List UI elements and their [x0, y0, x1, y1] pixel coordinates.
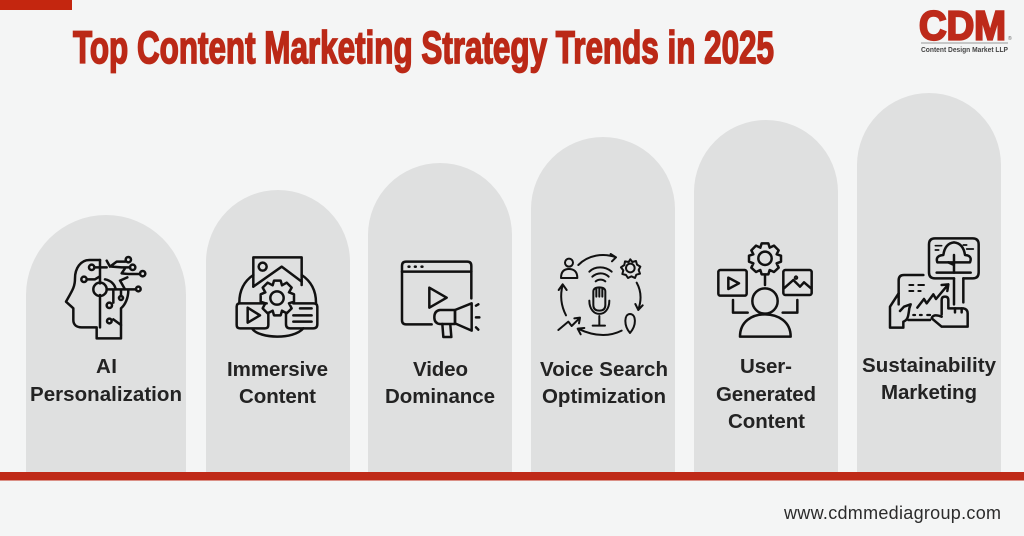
panel: AI Personalization	[26, 215, 186, 472]
label: Sustainability Marketing: Marketing	[881, 381, 977, 404]
panel: User-Generated Content	[694, 120, 838, 472]
label: Voice Search Optimization	[540, 358, 668, 408]
label: AI Personalization: Personalization	[30, 383, 182, 406]
label: Immersive Content: Content	[239, 385, 316, 408]
label: Immersive Content: Immersive	[227, 358, 328, 381]
icon: video with megaphone	[402, 262, 479, 337]
top-left accent bar	[0, 0, 72, 10]
logo: CDM: Content Design Market LLP	[921, 45, 1008, 54]
label: Voice Search Optimization: Voice Search	[540, 358, 668, 381]
logo: CDM: ®	[1008, 35, 1012, 42]
label: Immersive Content	[227, 358, 328, 408]
label: Sustainability Marketing: Sustainability	[862, 354, 997, 377]
icon: immersive content	[237, 257, 317, 337]
baseline red bar	[0, 472, 1024, 480]
logo: CDM: CDM	[919, 2, 1006, 48]
label: AI Personalization: AI	[96, 355, 117, 378]
icon: sustainability with tablet and chart	[890, 238, 979, 328]
label: User-Generated Content	[716, 355, 816, 433]
panel: Sustainability Marketing	[857, 93, 1001, 472]
label: Video Dominance: Dominance	[385, 385, 495, 408]
panel: Voice Search Optimization	[531, 137, 675, 472]
label: Video Dominance: Video	[413, 358, 468, 381]
label: Video Dominance	[385, 358, 495, 408]
icon: voice search cycle	[558, 254, 643, 335]
panel: Video Dominance	[368, 163, 512, 472]
label: AI Personalization	[30, 355, 182, 406]
website url: www.cdmmediagroup.com	[783, 503, 1001, 523]
panel: Immersive Content	[206, 190, 350, 472]
icon: AI head with circuits	[66, 257, 145, 338]
label: Voice Search Optimization: Optimization	[542, 385, 666, 408]
label: Sustainability Marketing	[862, 354, 997, 404]
label: User-Generated Content: Generated	[716, 383, 816, 406]
label: User-Generated Content: User-	[740, 355, 792, 378]
label: User-Generated Content: Content	[728, 410, 805, 433]
icon: user-generated content	[718, 243, 812, 337]
